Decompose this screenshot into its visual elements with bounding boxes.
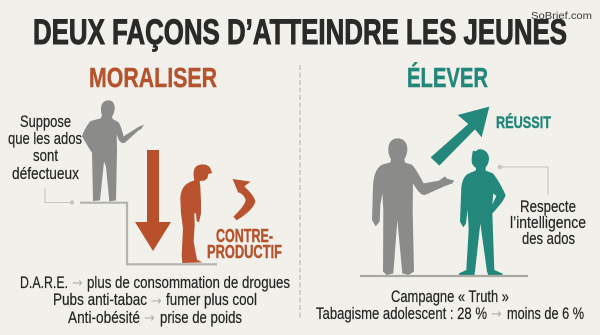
icon: grey adult pointing	[82, 100, 144, 201]
text: truth campaign result	[316, 288, 584, 323]
ground line	[360, 275, 528, 277]
text: truth campaign result: Tabagisme adolescent : 28 %	[316, 305, 487, 323]
icon: slumped teen	[180, 164, 212, 263]
stair line	[80, 203, 217, 264]
icon: grey adult with open hand	[372, 138, 454, 275]
text: failed campaigns: →	[144, 311, 155, 326]
label: contre-productif: CONTRE-	[216, 226, 273, 246]
text: suppose que les ados sont défectueux: défectueux	[12, 165, 80, 183]
text: failed campaigns: fumer plus cool	[166, 291, 257, 309]
text: failed campaigns: →	[72, 276, 83, 291]
arrow: upward	[431, 107, 489, 166]
text: failed campaigns: Anti-obésité	[68, 309, 140, 327]
watermark: SoBrief.com	[531, 11, 592, 22]
text: failed campaigns: prise de poids	[160, 309, 242, 327]
heading: moraliser: MORALISER	[89, 62, 217, 93]
label: réussit: RÉUSSIT	[496, 113, 551, 132]
text: suppose que les ados sont défectueux: Suppose	[20, 113, 71, 131]
label: contre-productif	[207, 226, 282, 262]
label: contre-productif: PRODUCTIF	[207, 242, 282, 262]
text: respecte l'intelligence des ados: l’intelligence	[510, 214, 586, 232]
text: respecte l'intelligence des ados: des ados	[522, 230, 575, 248]
icon: teal teen hand on hip	[459, 149, 506, 275]
text: failed campaigns: plus de consommation de drogues	[87, 274, 290, 292]
text: truth campaign result: Campagne « Truth »	[391, 288, 509, 306]
arrow: downward	[135, 150, 171, 251]
text: failed campaigns	[20, 274, 290, 327]
text: failed campaigns: D.A.R.E.	[20, 274, 68, 292]
text: suppose que les ados sont défectueux	[8, 113, 82, 183]
text: respecte l'intelligence des ados	[510, 198, 586, 248]
text: respecte l'intelligence des ados: Respecte	[520, 198, 576, 216]
text: suppose que les ados sont défectueux: sont	[33, 147, 58, 165]
panel: moraliser	[8, 62, 290, 327]
text: failed campaigns: →	[151, 294, 162, 309]
panel: élever	[316, 62, 586, 323]
text: suppose que les ados sont défectueux: que les ados	[8, 130, 82, 148]
arrow: curved back up	[233, 179, 255, 220]
text: truth campaign result: →	[491, 307, 502, 322]
text: failed campaigns: Pubs anti-tabac	[53, 291, 147, 309]
connector: label to step	[45, 188, 74, 204]
connector: label to teen	[498, 165, 548, 195]
heading: élever: ÉLEVER	[407, 62, 488, 93]
